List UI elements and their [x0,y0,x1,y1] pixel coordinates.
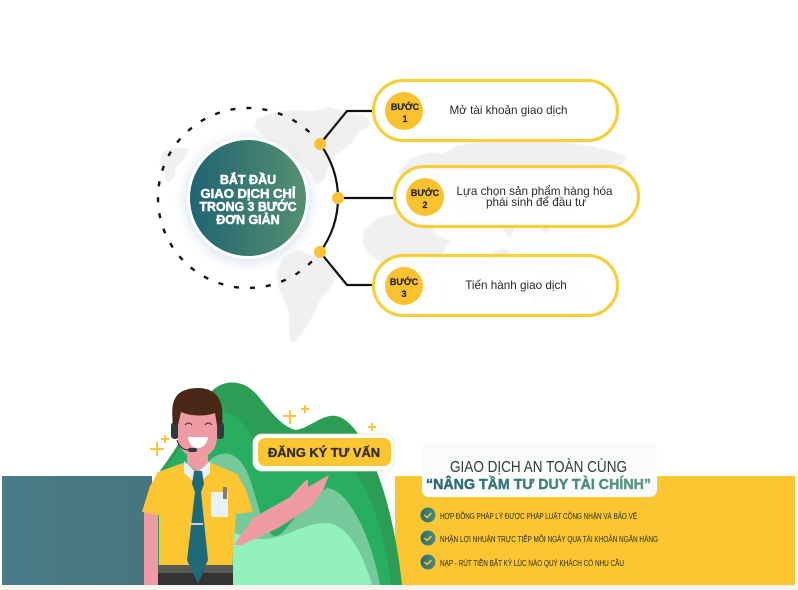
badge [211,492,228,517]
step 1 pill: 1 [402,114,408,124]
connector lines [320,111,393,285]
central hub circle: GIAO DỊCH CHỈ [200,186,296,201]
step 2 pill: 2 [422,200,428,210]
step 2 pill: BƯỚC [411,187,440,198]
dashed ring [158,108,320,288]
benefit 2 [420,530,658,546]
central hub circle: ĐƠN GIẢN [216,212,280,227]
benefit 3: NẠP - RÚT TIỀN BẤT KỲ LÚC NÀO QUÝ KHÁCH CÓ NHU CẦU [440,558,624,568]
central hub circle: BẮT ĐẦU [220,172,276,187]
safety heading card: GIAO DỊCH AN TOÀN CÙNG [450,459,627,476]
step 2 pill: phái sinh để đầu tư [486,196,586,209]
step 1 pill: BƯỚC [391,101,420,112]
consult button [253,434,394,471]
consult button: ĐĂNG KÝ TƯ VẤN [268,445,380,460]
left arm [144,512,158,585]
headset side [171,422,179,439]
safety heading card: “NÂNG TẦM TƯ DUY TÀI CHÍNH” [426,475,651,493]
world map background [160,107,628,344]
connector nodes [314,138,344,258]
step 2 pill: Lựa chọn sản phẩm hàng hóa [457,185,613,198]
central hub circle: TRONG 3 BƯỚC [200,199,296,214]
right arm [234,475,329,545]
trousers [158,565,233,585]
sparkles [150,405,376,456]
bottom band: teal [2,476,152,585]
benefit 3 [420,554,624,570]
eyes [185,423,212,425]
step 3 pill: Tiến hành giao dịch [465,279,567,292]
step 3 pill: BƯỚC [390,276,419,287]
benefit 1 [420,508,637,522]
step 3 pill: 3 [401,289,407,299]
step 1 pill [374,80,618,140]
safety heading card [422,442,657,497]
collar [184,461,210,480]
tie [187,471,208,584]
step 3 pill [374,256,618,316]
benefit 1: HỢP ĐỒNG PHÁP LÝ ĐƯỢC PHÁP LUẬT CỘNG NHẬN VÀ BẢO VỆ [440,510,637,521]
benefit 2: NHẬN LỢI NHUẬN TRỰC TIẾP MỖI NGÀY QUA TÀI KHOẢN NGÂN HÀNG [440,533,658,544]
shirt [142,463,253,565]
step 1 pill: Mở tài khoản giao dịch [449,104,568,117]
belt [158,565,233,573]
green hills [158,382,402,585]
central hub circle [184,136,312,264]
hair [172,388,222,425]
step 2 pill [394,166,638,226]
bottom band: yellow [395,476,795,585]
consultant figure [142,388,329,585]
microphone [177,440,189,450]
tie clip [190,523,203,525]
face [178,405,217,458]
neck [187,446,208,472]
smile [188,437,208,448]
